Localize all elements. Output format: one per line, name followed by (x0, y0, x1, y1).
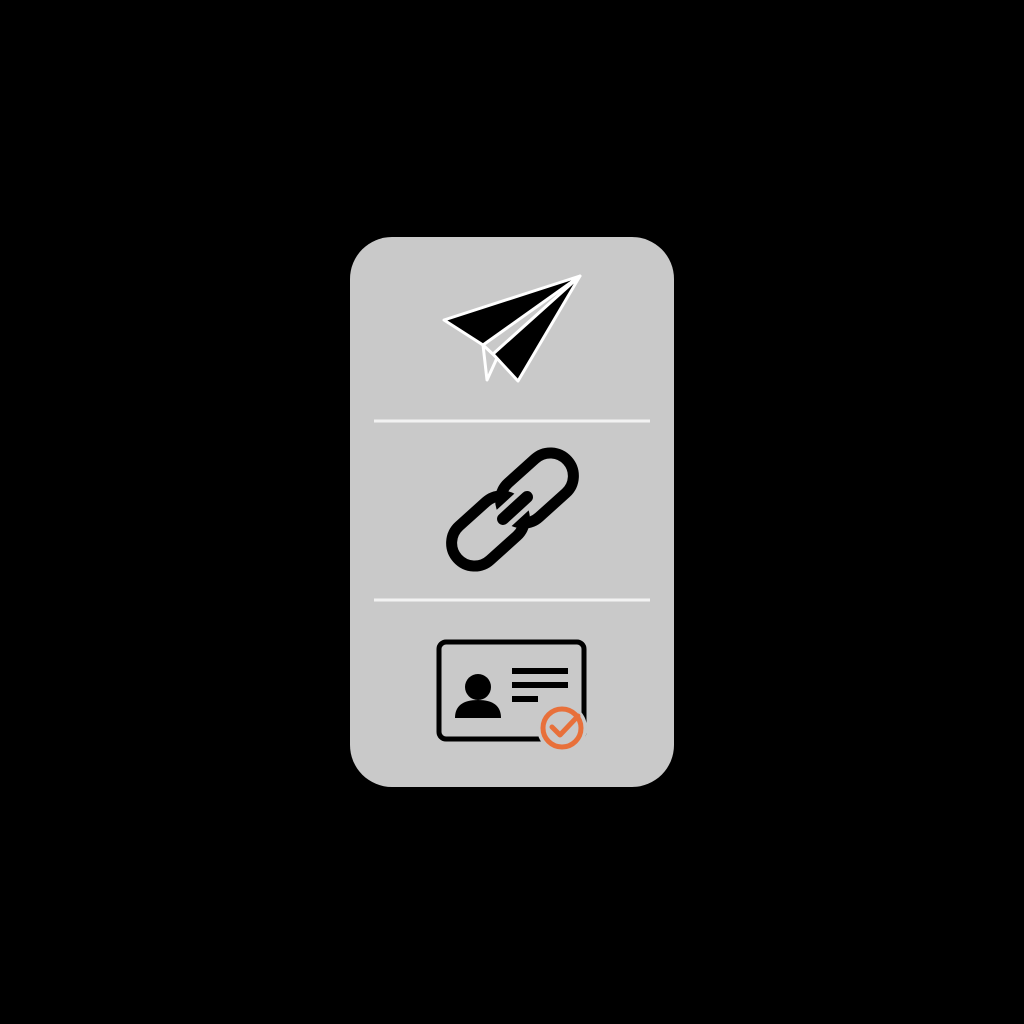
icon: paper plane (444, 276, 580, 381)
icon: verified ID card (439, 642, 587, 753)
icon: chain link (442, 443, 583, 576)
